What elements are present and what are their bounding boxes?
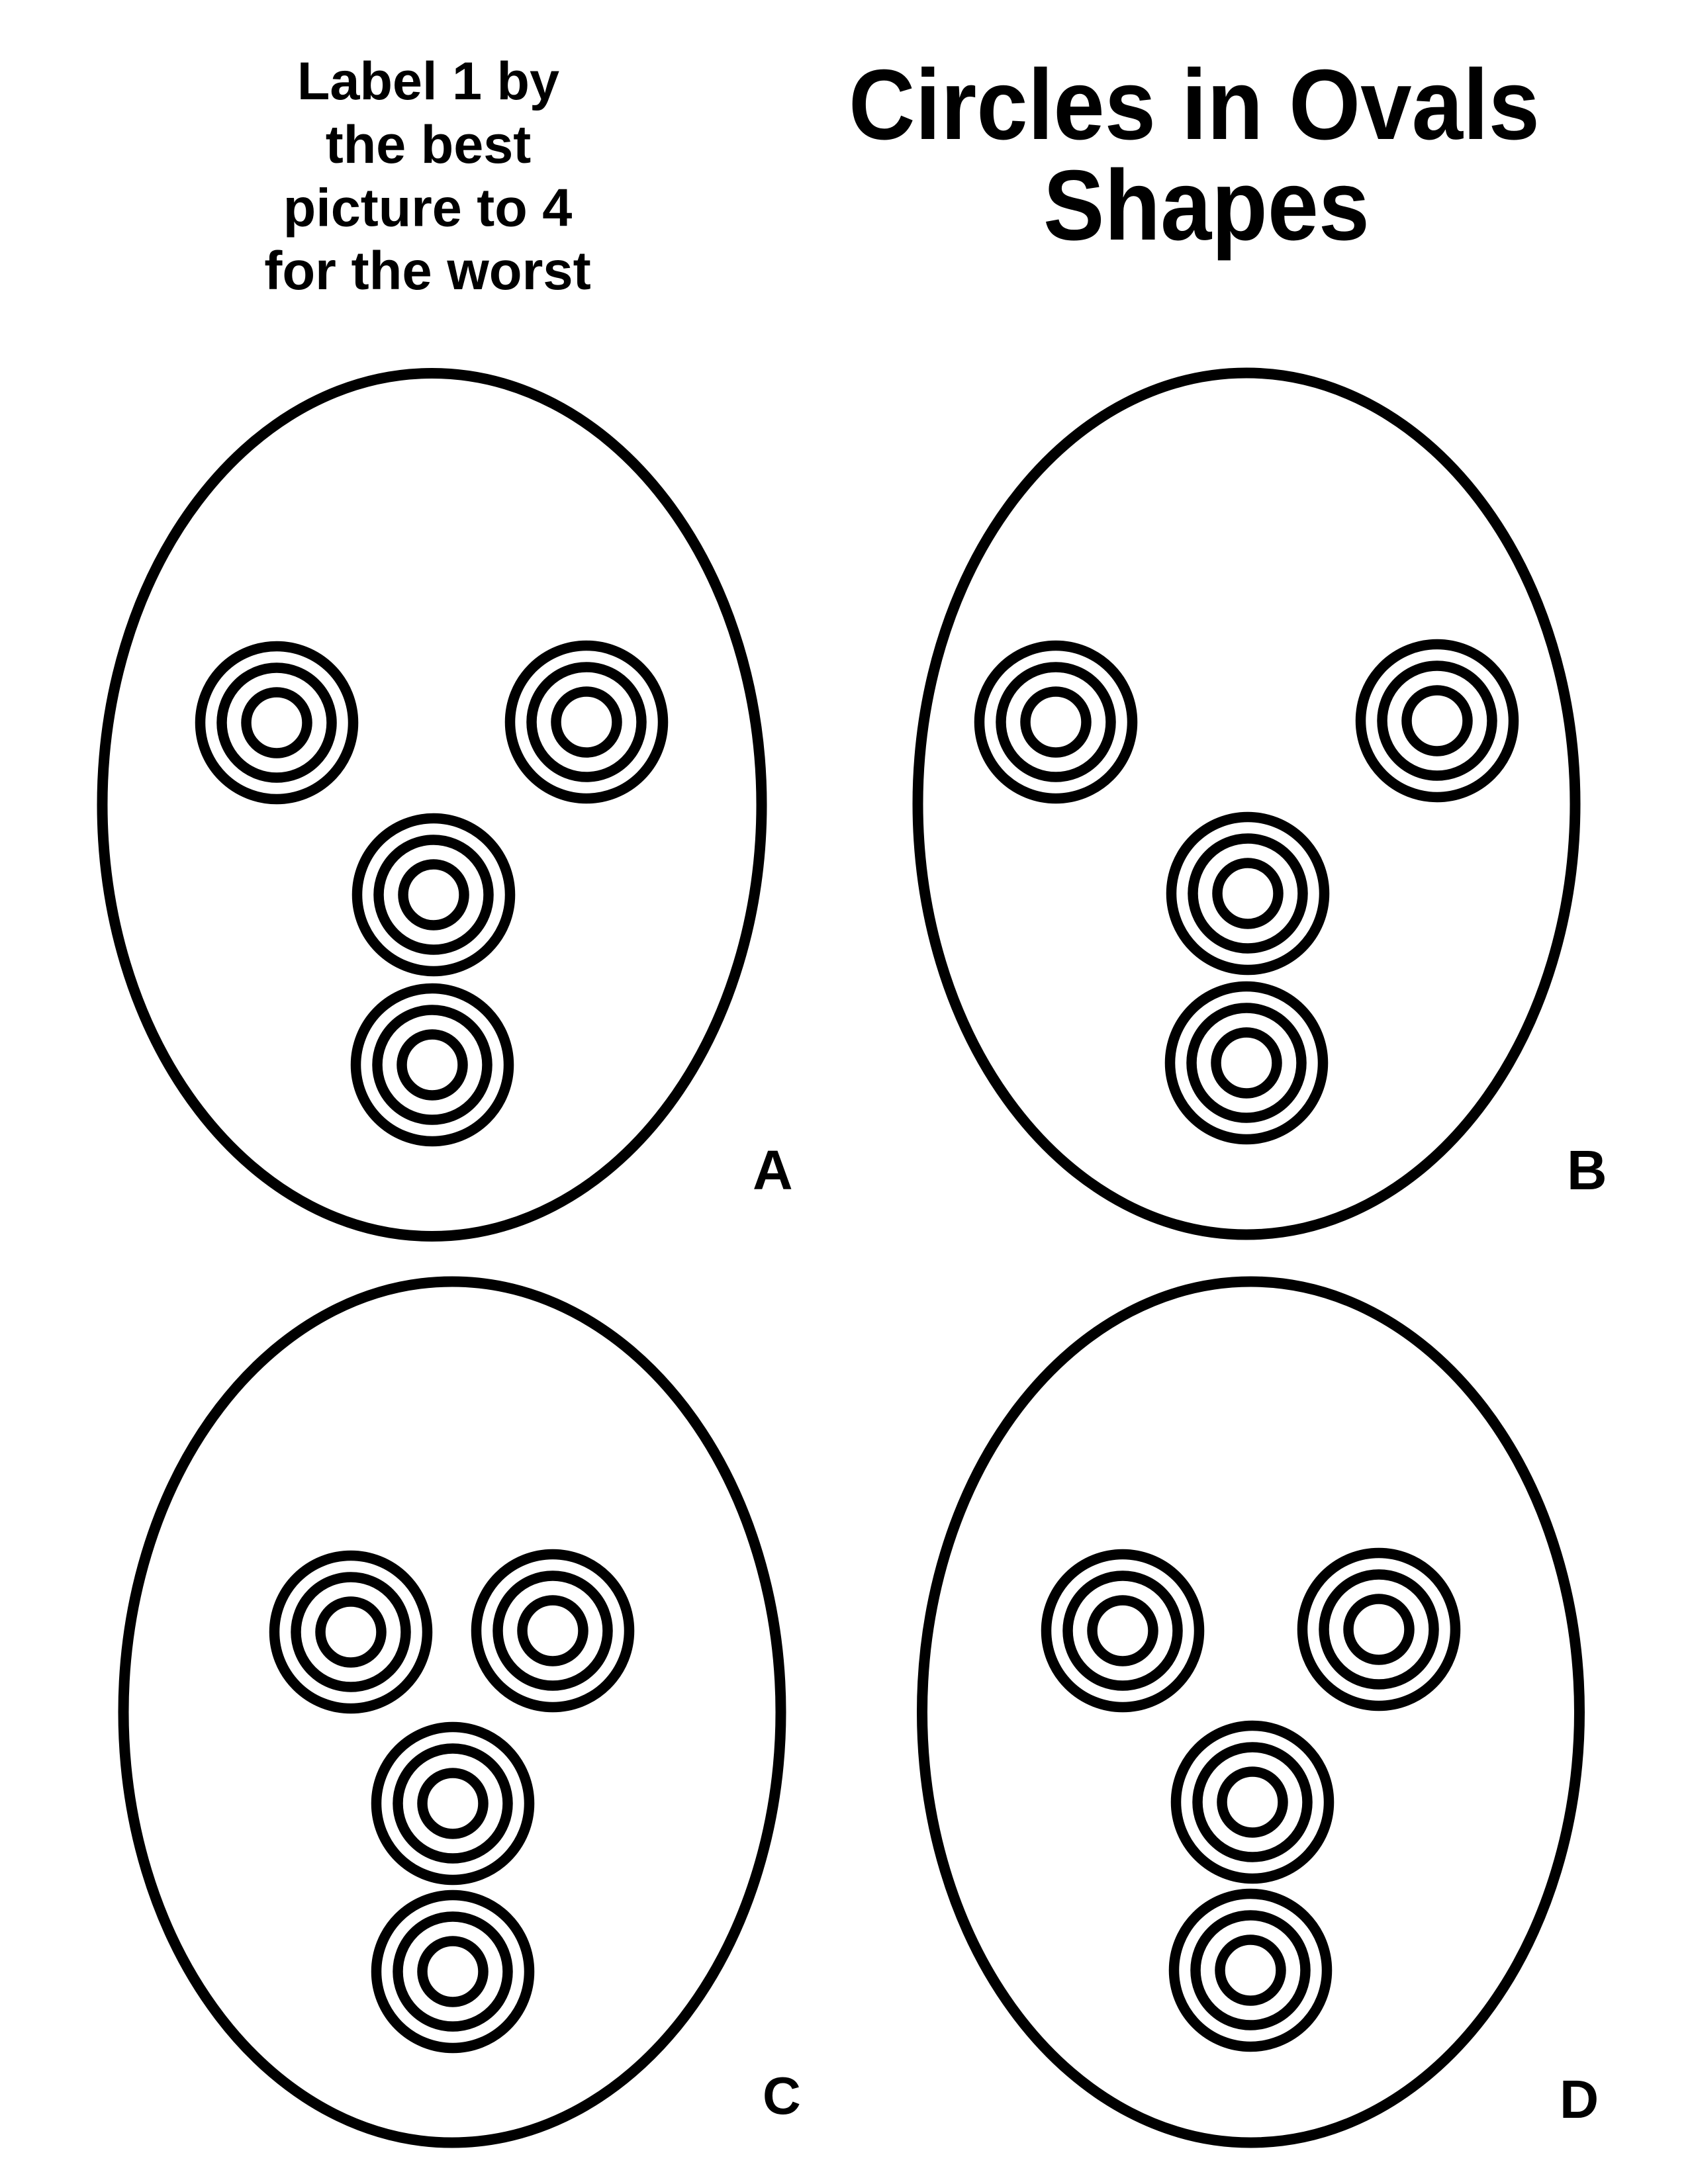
panel: oval C: C	[763, 2066, 801, 2125]
instructions text block	[264, 52, 591, 301]
instructions text block: Label 1 by	[297, 52, 559, 111]
instructions text block: the best	[326, 115, 531, 175]
panel: oval D: D	[1560, 2070, 1599, 2130]
panel: oval A	[102, 373, 793, 1236]
title: Circles in Ovals	[849, 48, 1540, 160]
panel: oval C	[123, 1281, 801, 2143]
panel: oval A: A	[753, 1139, 793, 1201]
panel: oval B: B	[1567, 1139, 1607, 1201]
panel: oval D	[922, 1281, 1599, 2143]
instructions text block: for the worst	[264, 241, 591, 301]
title: Shapes	[1043, 149, 1370, 261]
instructions text block: picture to 4	[283, 179, 572, 238]
title	[849, 48, 1540, 261]
panel: oval B	[917, 373, 1607, 1235]
